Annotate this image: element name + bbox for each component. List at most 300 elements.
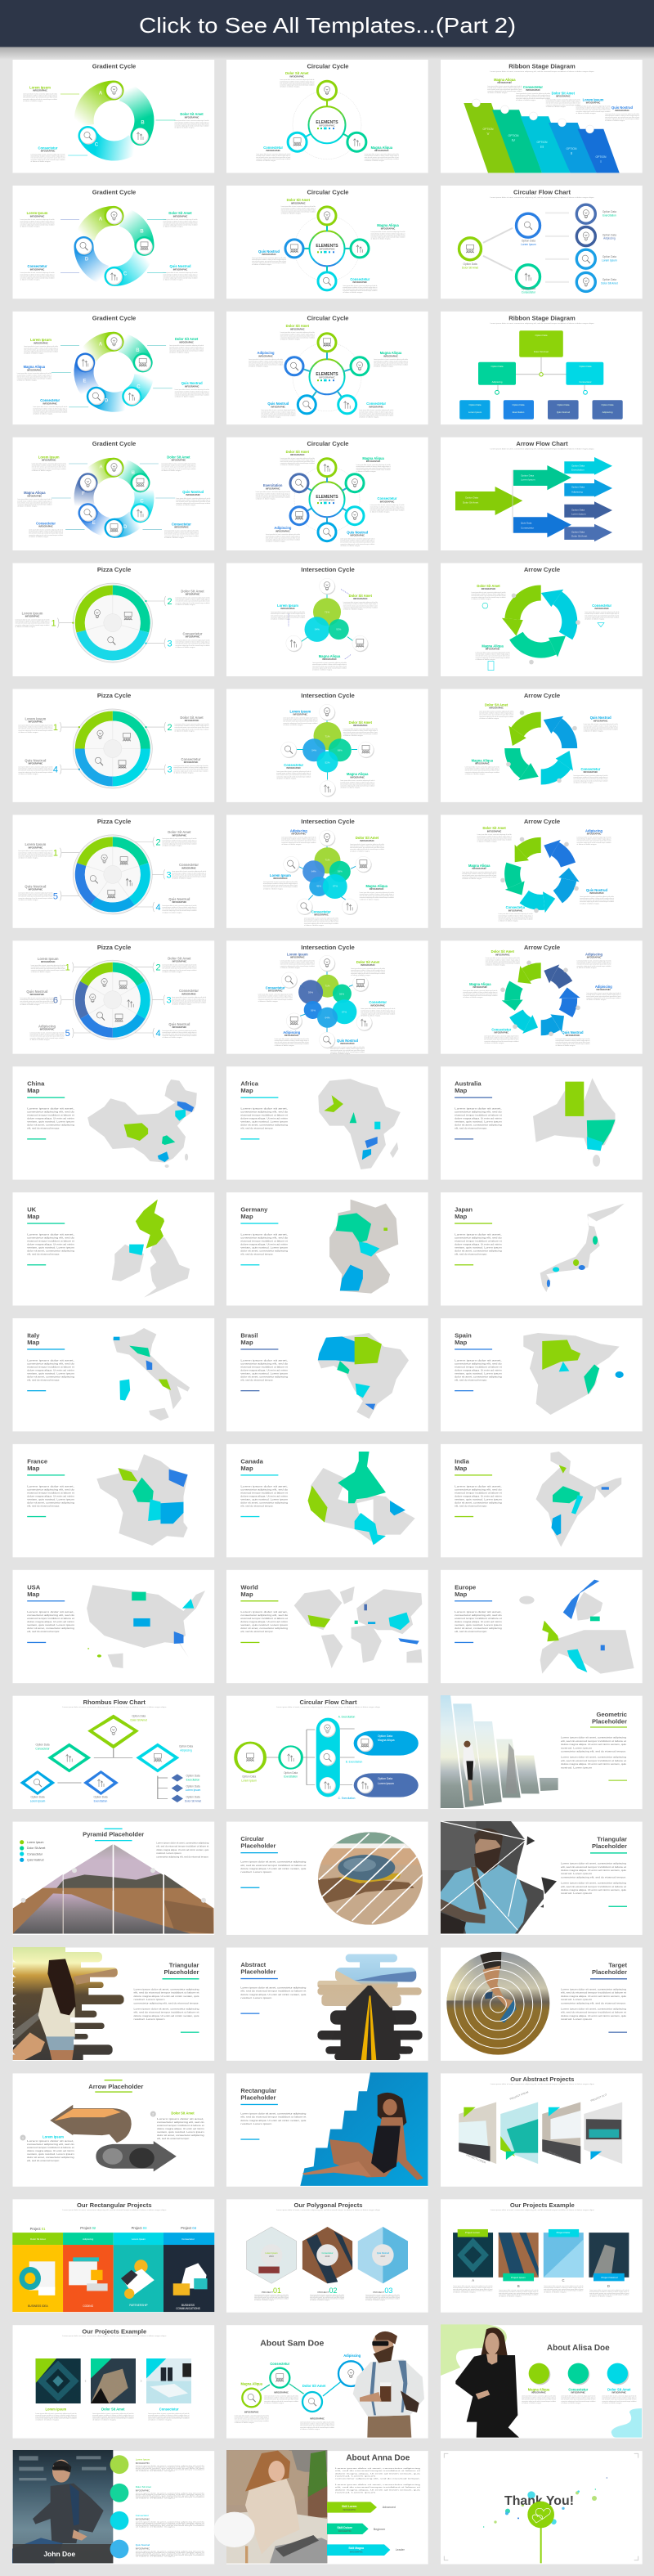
- text blocks: Consectetur: [28, 264, 47, 268]
- text blocks: Magna Aliqua: [240, 2381, 263, 2386]
- subtitle: [490, 70, 594, 73]
- flow nodes: [459, 204, 595, 291]
- text block: Triangular: [169, 1961, 199, 1969]
- hexagon text: PROJECT02: [317, 2287, 338, 2295]
- number callouts: 5: [53, 891, 58, 901]
- ribbons: IV: [512, 138, 515, 142]
- text blocks: Consectetur: [179, 989, 199, 993]
- intersection chart: 71%: [325, 858, 330, 861]
- step dots: [500, 837, 579, 913]
- map text: [27, 1331, 74, 1391]
- cycle chart: [78, 458, 150, 538]
- ribbons: OPTION: [482, 128, 494, 131]
- cycle chart: [290, 459, 364, 541]
- map text: Africa: [240, 1080, 259, 1088]
- intersection chart: 45%: [316, 884, 321, 887]
- blobs: [441, 2324, 642, 2438]
- panel: Circular Cycle 6: [226, 438, 428, 550]
- segment letters: D: [123, 525, 128, 530]
- text blocks: Dolor Sit Amet: [180, 716, 204, 720]
- panel: Arrow Cycle 5: [441, 815, 643, 928]
- panel: Ribbon Stage Diagram 2: [441, 312, 643, 424]
- photo tags: Project Ipsum: [511, 2276, 526, 2279]
- target photo: [444, 1951, 553, 2057]
- text blocks: Quis Nostrud: [347, 531, 369, 535]
- photo tags: Project Dolor: [557, 2231, 570, 2234]
- intersection chart: 71%: [325, 611, 329, 614]
- text block: Placeholder: [592, 1842, 627, 1850]
- step numbers: 2: [152, 2112, 155, 2116]
- title: Gradient Cycle: [92, 314, 136, 321]
- title: Intersection Cycle: [301, 818, 355, 825]
- flow labels: Option Data: [522, 287, 535, 290]
- arrow labels: Adipiscing: [571, 491, 583, 494]
- stem and dots: [483, 2477, 607, 2563]
- text blocks: [235, 2354, 361, 2430]
- text blocks: Magna Aliqua: [482, 644, 504, 648]
- panel: Circular Flow Chart 2: [226, 1696, 428, 1809]
- pyramid photo: [13, 1844, 214, 1934]
- flow labels: Option Data: [602, 210, 616, 213]
- project labels: [30, 2226, 197, 2231]
- map text: Europe: [455, 1583, 476, 1591]
- text blocks: Lorem Ipsum: [38, 957, 59, 961]
- hexagon text: 2016: [269, 2255, 274, 2258]
- number callouts: 4: [53, 765, 58, 775]
- intersection chart: 58%: [338, 869, 343, 873]
- map: [87, 1585, 205, 1668]
- flow labels: Magna Aliqua: [378, 1739, 395, 1742]
- skill labels: Leader: [396, 2548, 405, 2551]
- ribbons: V: [486, 132, 490, 136]
- cycle chart: [75, 332, 153, 406]
- text blocks: Magna Aliqua: [362, 456, 385, 460]
- panel: Rhombus Flow Chart: [13, 1696, 214, 1809]
- box labels: Option Data: [491, 365, 504, 368]
- step dots: [506, 711, 577, 783]
- map text: [240, 1583, 289, 1643]
- map text: [240, 1457, 289, 1517]
- text block: [561, 1961, 627, 2033]
- arrow chart: [500, 963, 581, 1036]
- legend: Quis Nostrud: [27, 1859, 43, 1862]
- panel: Australia Map: [441, 1066, 643, 1180]
- rhombus labels: Option Data: [186, 1775, 200, 1778]
- intersection chart: 71%: [325, 984, 330, 987]
- subtitle: [490, 448, 594, 451]
- legend: Dolor Sit Amet: [27, 1847, 45, 1850]
- hub nodes: [495, 373, 587, 394]
- subtitle: [490, 2083, 595, 2085]
- road photo: [316, 1952, 425, 2061]
- text blocks: [463, 949, 621, 1047]
- skill labels: Beginner: [374, 2528, 386, 2531]
- text blocks: Dolor Sit Amet: [349, 594, 373, 598]
- panel: Gradient Cycle 3: [13, 60, 214, 173]
- text blocks: Magna Aliqua: [472, 759, 494, 762]
- title: Circular Cycle: [307, 188, 349, 195]
- text blocks: [522, 2388, 637, 2404]
- map text: [27, 1583, 74, 1643]
- map: [112, 1200, 190, 1298]
- text blocks: Consectetur: [38, 146, 58, 150]
- flow labels: Option Data: [463, 263, 477, 266]
- title: Our Projects Example: [82, 2327, 146, 2335]
- panel: Africa Map: [226, 1066, 428, 1180]
- segment letters: A: [99, 92, 103, 96]
- text blocks: Consectetur: [284, 763, 304, 767]
- arrow labels: Option Data: [521, 474, 534, 478]
- subtitle: [490, 2209, 595, 2211]
- segment letters: C: [95, 142, 99, 147]
- panel: Pyramid Placeholder: [13, 1822, 214, 1935]
- text blocks: Dolor Sit Amet: [485, 703, 508, 707]
- intersection chart: 64%: [311, 869, 316, 873]
- name: John Doe: [43, 2550, 75, 2558]
- text block: Target: [608, 1961, 627, 1969]
- panel: India Map: [441, 1444, 643, 1557]
- panel: Intersection Cycle 4: [226, 689, 428, 802]
- text blocks: Consectetur: [350, 277, 370, 281]
- skill labels: [337, 2505, 405, 2553]
- map text: [455, 1331, 502, 1391]
- panel: Circular Flow Chart: [441, 186, 643, 298]
- text blocks: Adipiscing: [274, 526, 292, 530]
- panel: Triangular Placeholder (woman): [13, 1947, 214, 2061]
- panel: China Map: [13, 1066, 214, 1180]
- box labels: Lorem Ipsum: [468, 411, 482, 414]
- text blocks: Dolor Sit Amet: [181, 589, 204, 593]
- flow labels: Exercitation: [602, 213, 616, 217]
- title: About Anna Doe: [346, 2453, 410, 2463]
- number callouts: 4: [155, 1029, 161, 1039]
- card captions: PROJECT ELIT: [590, 2093, 607, 2103]
- flow labels: Lorem Ipsum: [378, 1782, 394, 1785]
- text blocks: Dolor Sit Amet: [168, 211, 192, 215]
- panel: Gradient Cycle 5: [13, 312, 214, 424]
- text blocks: Quis Nostrud: [337, 1039, 358, 1043]
- title: Pizza Cycle: [97, 692, 131, 699]
- text block: [561, 1836, 627, 1907]
- woman photo: [13, 1947, 128, 2060]
- legend: Lorem Ipsum: [27, 1841, 44, 1844]
- box labels: Option Data: [558, 403, 570, 406]
- title: Gradient Cycle: [92, 440, 136, 447]
- ribbons: OPTION: [508, 134, 519, 137]
- cycle chart: [285, 334, 369, 414]
- text blocks: Dolor Sit Amet: [491, 949, 515, 954]
- text blocks: [17, 455, 211, 539]
- arrow labels: Lorem Ipsum: [521, 478, 535, 482]
- text blocks: Consectetur: [378, 496, 397, 500]
- text blocks: [20, 211, 198, 281]
- rhombus labels: Dolor Sit Amet: [185, 1799, 201, 1802]
- map text: Map: [27, 1087, 40, 1094]
- segment letters: A: [99, 343, 103, 348]
- arrow labels: Option Data: [571, 509, 585, 512]
- column text: BUSINESS IDEA: [28, 2304, 48, 2308]
- project cards: [459, 2102, 622, 2164]
- rhombus labels: Lorem Ipsum: [30, 1799, 46, 1802]
- flow icons: [466, 210, 590, 286]
- segment letters: A: [99, 217, 103, 222]
- text block: Geometric: [596, 1711, 627, 1718]
- ribbons: [464, 99, 620, 173]
- captions: [254, 2294, 400, 2301]
- skill labels: Skill Dolore: [337, 2526, 352, 2529]
- box labels: Option Data: [535, 334, 548, 337]
- text blocks: Lorem Ipsum: [43, 2135, 64, 2139]
- map text: Map: [240, 1465, 253, 1472]
- title: Intersection Cycle: [301, 566, 355, 573]
- segment letters: C: [137, 384, 141, 389]
- map text: Map: [27, 1591, 40, 1598]
- text block: [240, 1835, 307, 1888]
- box labels: Option Data: [580, 365, 592, 368]
- cycle chart: [78, 80, 150, 151]
- map text: Japan: [455, 1206, 473, 1214]
- panel: About Alisa Doe: [441, 2324, 643, 2439]
- rhombus labels: Lorem Ipsum: [186, 1788, 201, 1792]
- panel: Our Polygonal Projects: [226, 2199, 428, 2313]
- text blocks: Consectetur: [136, 2514, 149, 2517]
- arrow labels: Option Data: [465, 496, 478, 500]
- text blocks: [136, 2458, 204, 2557]
- text blocks: Adipiscing: [343, 2354, 361, 2358]
- text blocks: Quis Nostrud: [25, 885, 47, 889]
- skill labels: INFOGRAPHIC: [350, 2551, 363, 2553]
- person: [455, 2327, 519, 2438]
- text blocks: Consectetur: [183, 631, 203, 635]
- boxes: [459, 330, 623, 420]
- text block: [240, 2087, 307, 2140]
- hexagon text: Consectetur: [322, 2251, 334, 2255]
- number callouts: [53, 837, 172, 913]
- title: Pizza Cycle: [97, 944, 131, 951]
- number callouts: 4: [155, 903, 161, 913]
- heading: Click to See All Templates...(Part 2): [139, 13, 516, 38]
- man photo: [441, 1821, 557, 1934]
- panel: Circular Cycle 4: [226, 186, 428, 298]
- number callouts: 2: [155, 963, 161, 973]
- text blocks: Exercitation: [263, 483, 283, 487]
- text blocks: INFOGRAPHIC: [136, 2548, 150, 2550]
- text blocks: Dolor Sit Amet: [482, 826, 506, 830]
- text blocks: Dolor Sit Amet: [349, 720, 373, 725]
- panel: Italy Map: [13, 1318, 214, 1431]
- flow labels: Dolor Sit Amet: [462, 267, 478, 270]
- text blocks: Magna Aliqua: [494, 78, 516, 82]
- flow labels: A. Exercitation: [338, 1716, 355, 1719]
- number callouts: 3: [167, 640, 172, 649]
- text blocks: [15, 589, 210, 648]
- panel: USA Map: [13, 1570, 214, 1683]
- title: Circular Flow Chart: [299, 1699, 357, 1706]
- panel: Germany Map: [226, 1192, 428, 1305]
- title: Circular Cycle: [307, 440, 349, 447]
- text blocks: [335, 2467, 421, 2493]
- map text: Map: [455, 1087, 468, 1094]
- corner dots: [21, 1868, 206, 1903]
- map: [318, 1079, 401, 1169]
- text blocks: Consectetur: [523, 85, 543, 89]
- box labels: Option Data: [602, 403, 614, 406]
- text blocks: Magna Aliqua: [319, 654, 341, 658]
- rhombus labels: Option Data: [93, 1796, 108, 1799]
- text blocks: Quis Nostrud: [181, 381, 203, 385]
- outline icons: [482, 603, 604, 671]
- panel: Arrow Cycle 4: [441, 689, 643, 802]
- column text: CODING: [83, 2304, 94, 2308]
- arrow labels: Dolor Sit Amet: [571, 535, 587, 538]
- text blocks: Magna Aliqua: [377, 223, 399, 227]
- map text: Map: [27, 1339, 40, 1346]
- panel: About Sam Doe: [226, 2325, 428, 2439]
- arrow stems: [512, 470, 513, 533]
- flow labels: Option Data: [242, 1775, 256, 1779]
- subtitle: [490, 322, 594, 325]
- hexagons: [247, 2227, 408, 2283]
- carousel arrows: ‹: [84, 2379, 87, 2385]
- hexagon text: Lorem Ipsum: [265, 2251, 278, 2255]
- text blocks: Magna Aliqua: [347, 772, 369, 776]
- text blocks: [258, 952, 396, 1055]
- text blocks: Dolor Sit Amet: [175, 337, 199, 341]
- title bar: [95, 2091, 132, 2093]
- hexagon text: PROJECT01: [262, 2287, 281, 2295]
- text blocks: Lorem Ipsum: [287, 953, 308, 957]
- column text: COMMUNICATIONS: [176, 2307, 200, 2310]
- captions: Lorem Ipsum: [45, 2408, 67, 2411]
- map text: [27, 1206, 74, 1265]
- text block: Placeholder: [164, 1968, 199, 1976]
- text blocks: [18, 716, 209, 775]
- panel: France Map: [13, 1444, 214, 1557]
- segment letters: D: [105, 399, 109, 404]
- panel: Japan Map: [441, 1192, 643, 1305]
- map text: [240, 1206, 289, 1265]
- title: Intersection Cycle: [301, 692, 355, 699]
- corner marks: [444, 2453, 638, 2560]
- arrow labels: Exercitation: [571, 469, 585, 472]
- text blocks: Quis Nostrud: [182, 490, 204, 494]
- text blocks: Dolor Sit Amet: [168, 830, 191, 834]
- map text: Australia: [455, 1080, 482, 1088]
- text blocks: Dolor Sit Amet: [136, 2485, 151, 2488]
- rhombus labels: Option Data: [30, 1796, 45, 1799]
- text blocks: INFOGRAPHIC: [136, 2519, 150, 2520]
- text blocks: Quis Nostrud: [170, 264, 191, 268]
- stair photo: [300, 2072, 428, 2186]
- title: Ribbon Stage Diagram: [508, 62, 576, 70]
- map: [87, 1079, 197, 1168]
- panel: Canada Map: [226, 1444, 428, 1557]
- text block: Placeholder: [592, 1718, 627, 1726]
- rhombus labels: Option Data: [132, 1715, 146, 1718]
- map text: [27, 1457, 74, 1517]
- ribbons: OPTION: [566, 147, 577, 150]
- text blocks: Quis Nostrud: [26, 990, 48, 994]
- panel: Europe Map: [441, 1570, 643, 1683]
- text blocks: Quis Nostrud: [168, 1022, 190, 1026]
- box labels: Quis Nostrud: [557, 411, 571, 414]
- map text: [455, 1080, 502, 1140]
- arrow chart: [508, 716, 573, 780]
- text blocks: Magna Aliqua: [371, 146, 393, 150]
- map text: Italy: [27, 1331, 40, 1340]
- text blocks: Dolor Sit Amet: [552, 92, 576, 95]
- text blocks: Dolor Sit Amet: [287, 198, 311, 202]
- segment letters: F: [82, 491, 85, 496]
- segment letters: B: [136, 348, 140, 353]
- skill labels: Skill Lorem: [342, 2505, 356, 2508]
- header banner: [0, 0, 654, 47]
- text block: [561, 1711, 627, 1781]
- text blocks: Adipiscing: [283, 1030, 301, 1034]
- text blocks: Dolor Sit Amet: [356, 960, 380, 964]
- title: Circular Flow Chart: [513, 188, 571, 195]
- text blocks: [276, 710, 378, 789]
- card captions: PROJECT LOREM: [466, 2153, 486, 2165]
- title bar: [95, 1840, 132, 1841]
- panel: Pizza Cycle 3: [13, 563, 214, 676]
- number callouts: 1: [51, 619, 56, 629]
- text blocks: Consectetur: [270, 2362, 290, 2366]
- map text: Map: [455, 1213, 468, 1220]
- step numbers: [20, 2112, 156, 2141]
- panel: Ribbon Stage Diagram 1: [441, 60, 643, 173]
- segment letters: C: [123, 272, 128, 277]
- panel: Our Abstract Projects: [441, 2073, 643, 2187]
- title: Pizza Cycle: [97, 818, 131, 825]
- rhombus labels: [30, 1715, 201, 1802]
- panel: Circular Placeholder: [226, 1822, 428, 1935]
- title: Our Abstract Projects: [510, 2076, 574, 2083]
- panel: Arrow Placeholder: [13, 2073, 214, 2187]
- skill labels: INFOGRAPHIC: [338, 2530, 352, 2533]
- captions: C: [562, 2278, 565, 2282]
- flow labels: B. Exercitation: [346, 1761, 362, 1764]
- column text: Lorem Ipsum: [132, 2237, 146, 2241]
- flow nodes: [247, 1721, 374, 1793]
- arrows: [455, 457, 612, 541]
- rhombus labels: Adipiscing: [180, 1748, 192, 1752]
- arrow chart: [502, 581, 585, 670]
- intersection chart: [281, 955, 373, 1048]
- hexagon text: PROJECT03: [373, 2287, 392, 2295]
- text blocks: Quis Nostrud: [258, 249, 280, 254]
- text blocks: Lorem Ipsum: [277, 604, 298, 608]
- map: [329, 1200, 398, 1294]
- panel: World Map: [226, 1570, 428, 1683]
- flow labels: Option Data: [378, 1777, 392, 1780]
- title: Arrow Flow Chart: [516, 440, 568, 447]
- arrow labels: Option Data: [571, 531, 585, 534]
- text blocks: Adipiscing: [258, 351, 275, 355]
- intersection chart: 64%: [325, 1016, 330, 1019]
- box labels: Option Data: [513, 403, 525, 406]
- text block: Placeholder: [240, 1968, 275, 1976]
- rhombus shapes: [20, 1715, 183, 1802]
- step dots: [500, 960, 580, 1036]
- title: About Sam Doe: [260, 2339, 325, 2349]
- box labels: Option Data: [469, 403, 482, 406]
- text blocks: Magna Aliqua: [380, 351, 402, 355]
- panel: Arrow Flow Chart: [441, 438, 643, 550]
- panel: Gradient Cycle 4: [13, 186, 214, 298]
- arrow chart: [505, 840, 580, 913]
- pizza chart: [73, 960, 152, 1039]
